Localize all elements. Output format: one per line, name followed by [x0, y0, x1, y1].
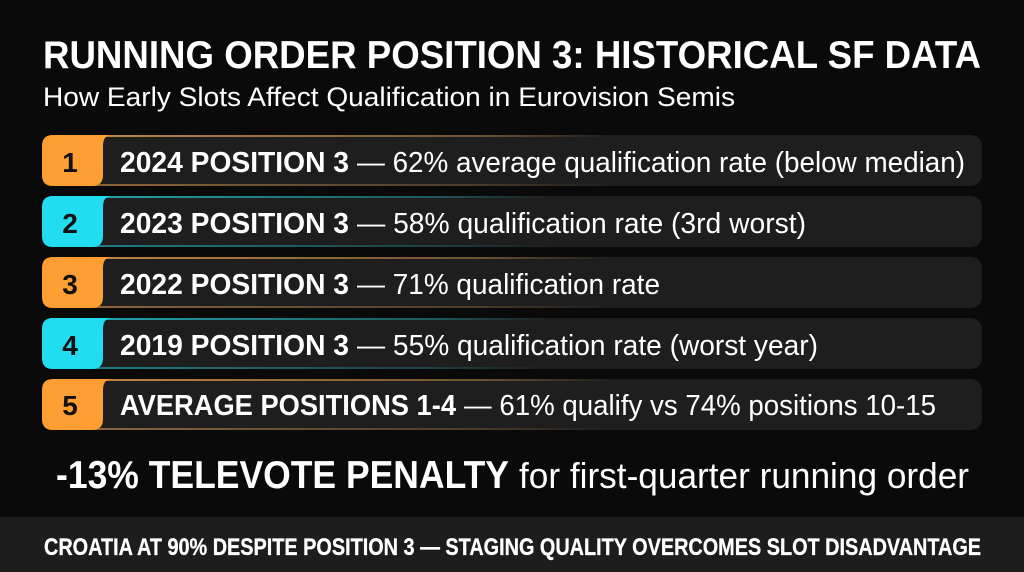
- row 5 text: AVERAGE POSITIONS 1-4: [120, 390, 456, 422]
- callout: televote penalty: -13% TELEVOTE PENALTY: [56, 454, 509, 497]
- title: RUNNING ORDER POSITION 3: HISTORICAL SF DATA: [43, 34, 981, 77]
- row 2 text: [120, 208, 806, 240]
- badge 4: 4: [62, 330, 78, 361]
- row 1 text: [120, 147, 965, 179]
- callout: televote penalty: [56, 454, 969, 497]
- badge 2: [42, 196, 112, 247]
- list panel: row 2: [42, 196, 982, 247]
- badge 1: [42, 135, 112, 186]
- subtitle: How Early Slots Affect Qualification in Eurovision Semis: [43, 82, 735, 112]
- badge 2: 2: [62, 208, 78, 239]
- list panel: row 1: [42, 135, 982, 186]
- row 2 text: 2023 POSITION 3: [120, 208, 349, 240]
- footer band: [0, 517, 1024, 572]
- row 4 text: — 55% qualification rate (worst year): [357, 330, 818, 362]
- badge 3: 3: [62, 269, 78, 300]
- row 5 text: [120, 390, 936, 422]
- row 4 text: 2019 POSITION 3: [120, 330, 349, 362]
- row 1 text: 2024 POSITION 3: [120, 147, 349, 179]
- row 3 text: — 71% qualification rate: [357, 269, 660, 301]
- row 3 text: 2022 POSITION 3: [120, 269, 349, 301]
- row 5 text: — 61% qualify vs 74% positions 10-15: [464, 390, 936, 422]
- row 3 text: [120, 269, 660, 301]
- callout: televote penalty: for first-quarter running order: [519, 455, 969, 496]
- badge 5: [42, 379, 112, 430]
- row 2 text: — 58% qualification rate (3rd worst): [357, 208, 806, 240]
- badge 5: 5: [62, 390, 78, 421]
- badge 1: 1: [62, 147, 78, 178]
- list panel: row 4: [42, 318, 982, 369]
- badge 4: [42, 318, 112, 369]
- row 1 text: — 62% average qualification rate (below median): [357, 147, 965, 179]
- badge 3: [42, 257, 112, 308]
- row 4 text: [120, 330, 818, 362]
- list panel: row 5: [42, 379, 982, 430]
- list panel: row 3: [42, 257, 982, 308]
